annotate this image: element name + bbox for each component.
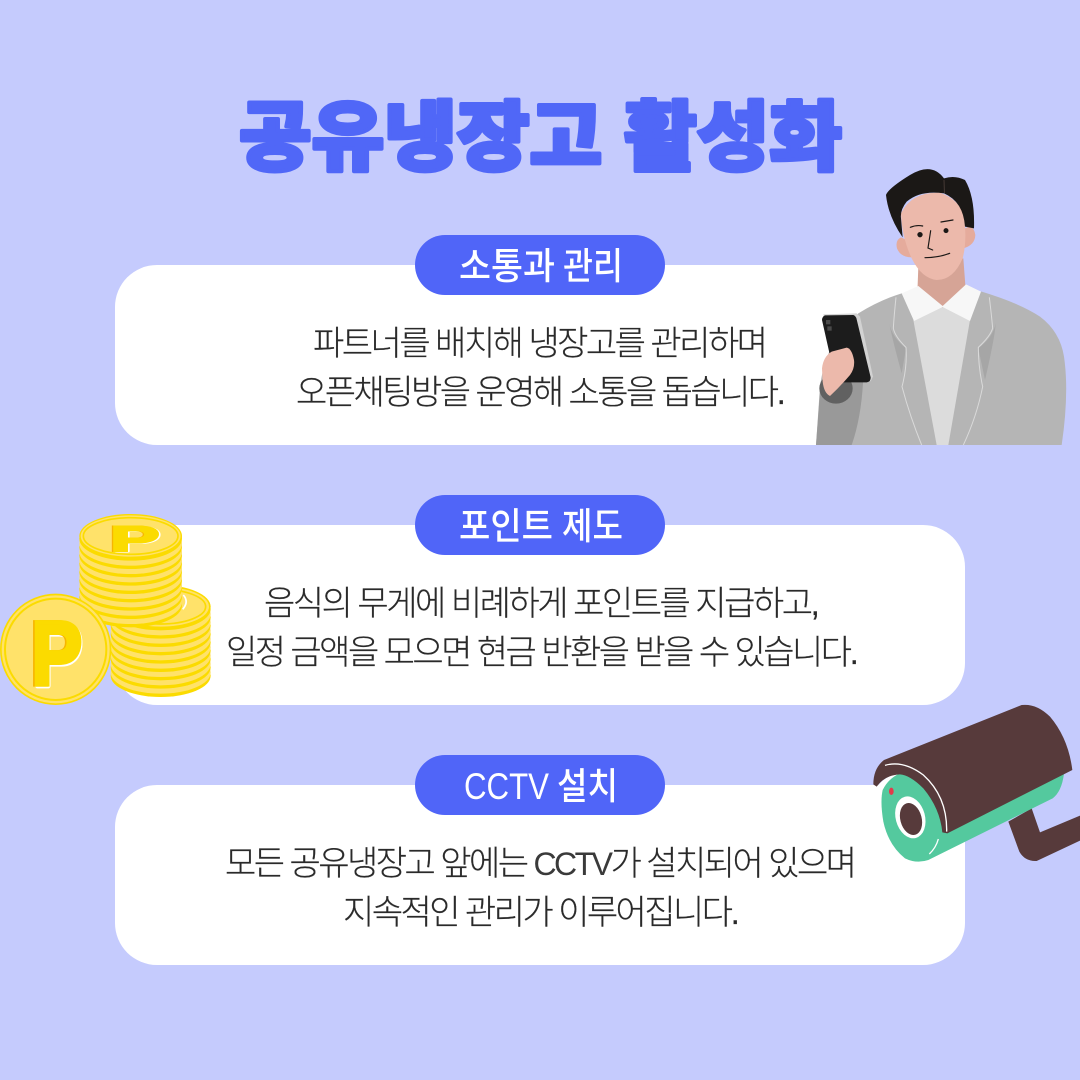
coin stack: top: P [112,521,161,560]
coin: front [0,594,111,705]
text block: communication description [296,325,786,412]
panel: CCTV installation [115,755,965,965]
heading pill: CCTV installation [415,755,665,815]
heading pill: CCTV installation: CCTV [464,766,549,807]
heading pill: point system: 포인트 [459,506,553,547]
text block: communication description: 파트너를 배치해 냉장고를 관리하며 [313,325,768,363]
panel: point system [115,495,965,705]
icon: stacked gold point coins [0,514,211,705]
heading pill: communication and management: 관리 [563,246,623,287]
icon: man holding a smartphone [816,169,1066,445]
coin: front: P [32,603,82,704]
title: 공유냉장고 활성화 [239,96,842,181]
text block: CCTV description [225,845,857,932]
text block: communication description: 오픈채팅방을 운영해 소통을 돕습니다. [296,374,786,412]
heading pill: point system: 제도 [562,506,623,547]
coin: front: P [30,603,80,704]
text block: point description: 음식의 무게에 비례하게 포인트를 지급하고, [264,585,820,623]
coin stack: top [79,514,182,627]
icon: CCTV camera [873,705,1080,862]
heading pill: point system [415,495,665,555]
heading pill: communication and management [415,235,665,295]
panel: communication and management [115,235,965,445]
text block: point description: 일정 금액을 모으면 현금 반환을 받을 수 있습니다. [226,634,859,672]
heading pill: communication and management: 소통과 [459,246,555,287]
heading pill: CCTV installation: 설치 [557,766,618,807]
coin stack: back [111,585,211,697]
coin stack: top: P [110,520,159,559]
text block: point description [226,585,859,672]
coin: front: P [32,605,83,705]
text block: CCTV description: 모든 공유냉장고 앞에는 CCTV가 설치되어 있으며 [225,845,857,883]
coin stack: top: P [109,520,158,559]
text block: CCTV description: 지속적인 관리가 이루어집니다. [343,894,740,932]
